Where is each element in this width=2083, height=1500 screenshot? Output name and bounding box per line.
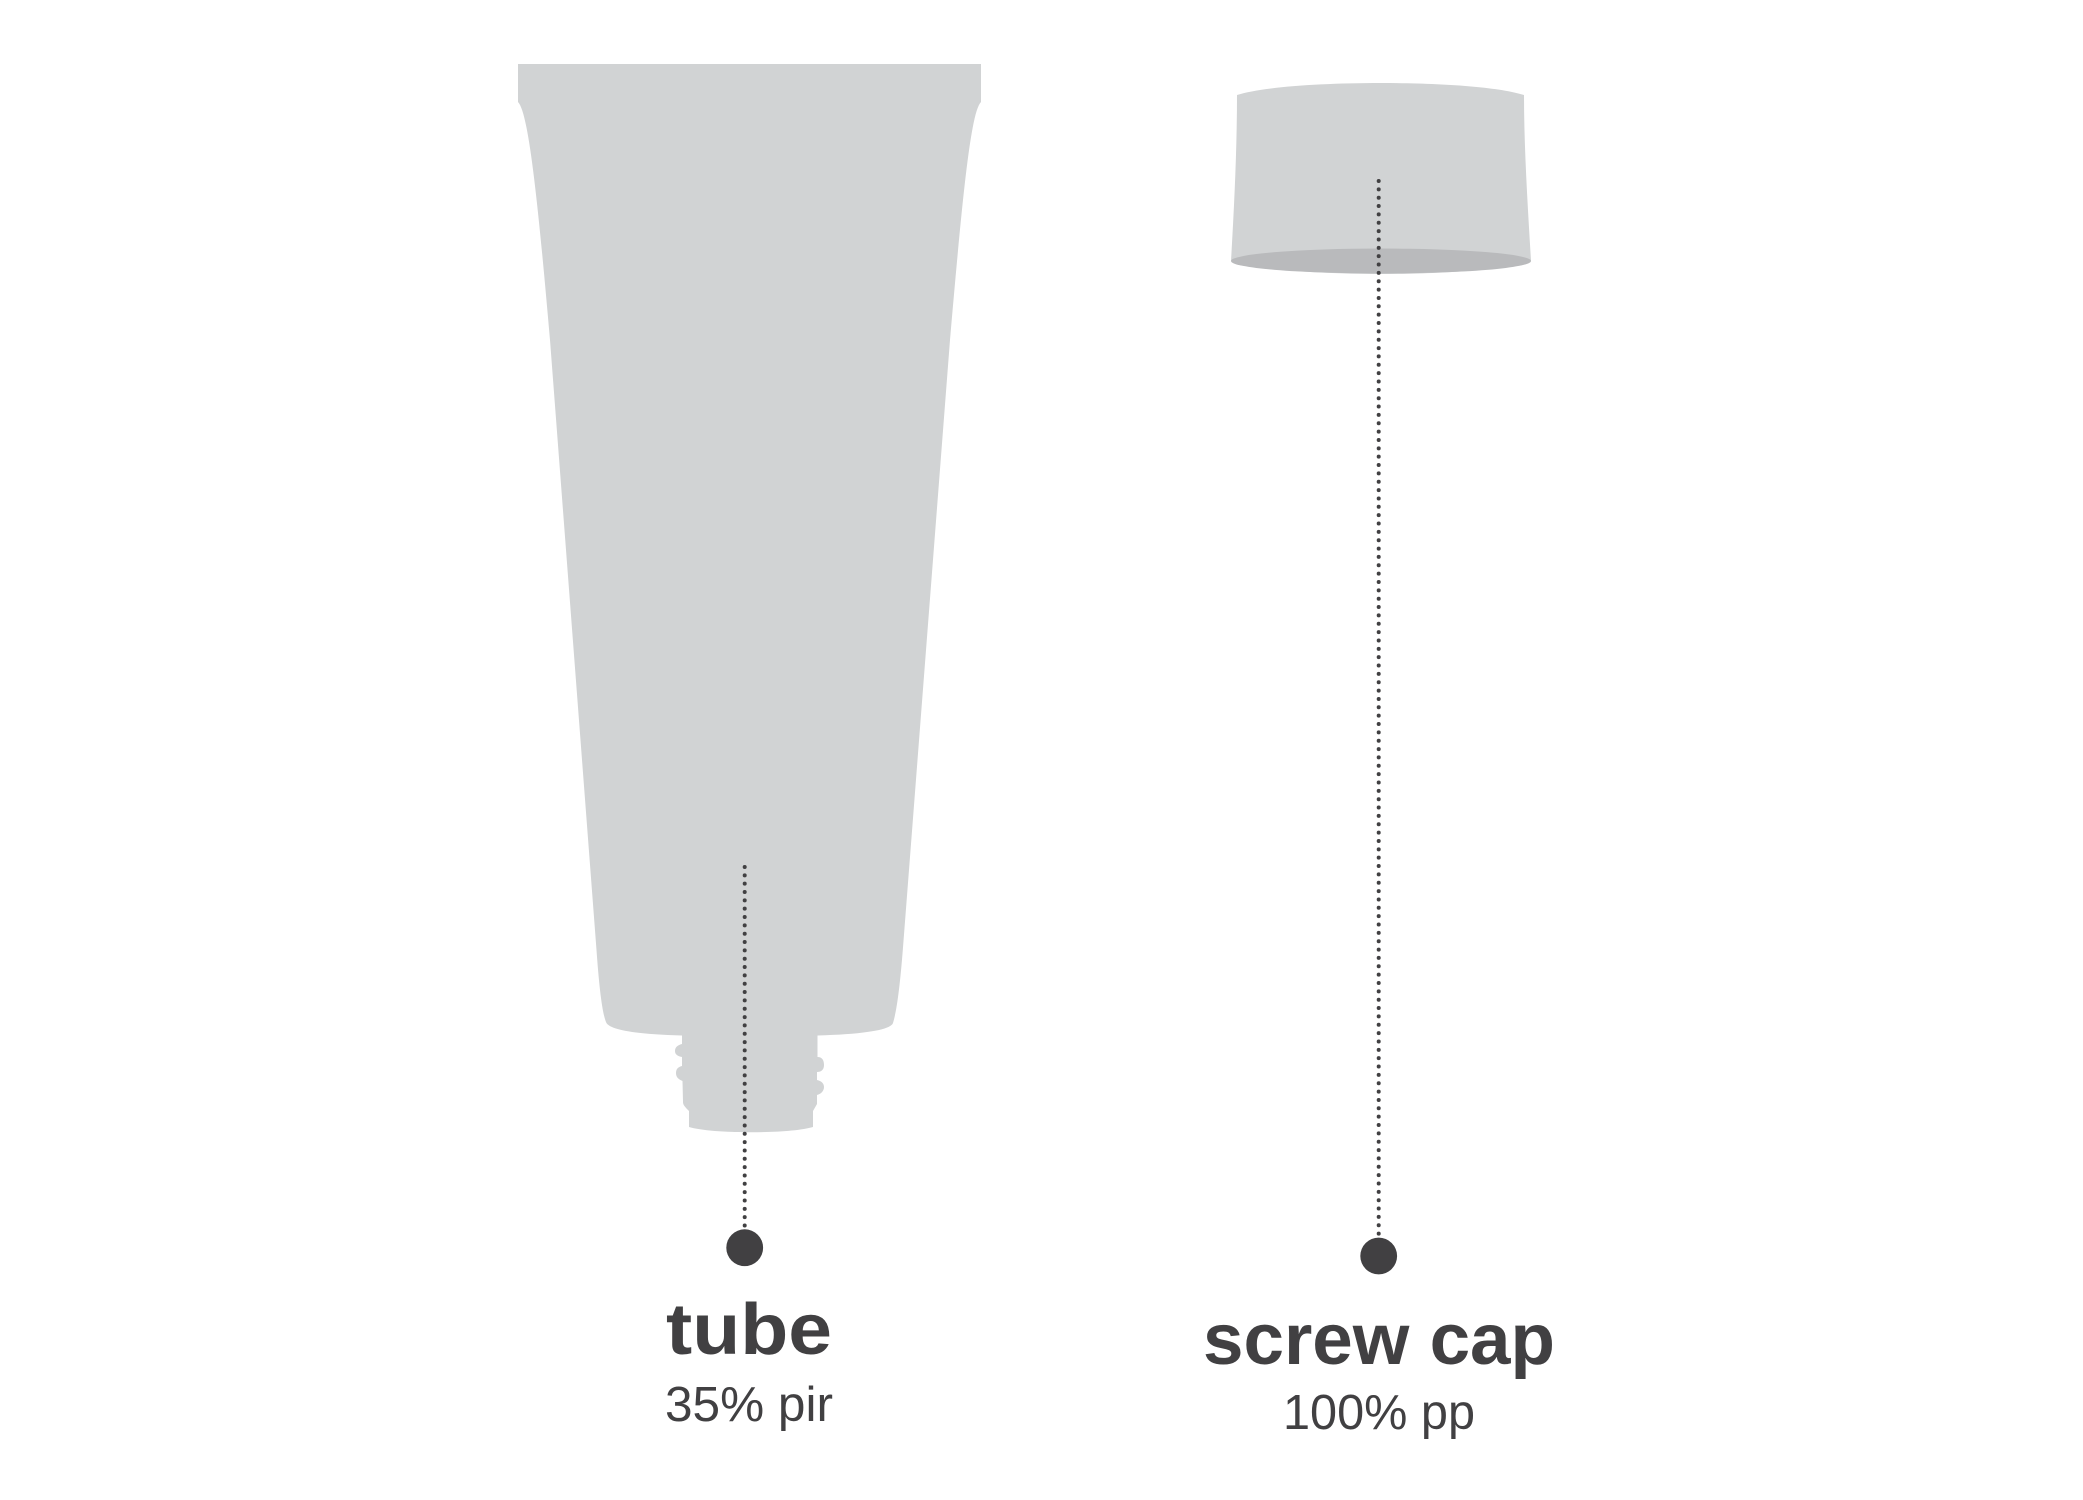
screw cap component (1203, 83, 1555, 1440)
tube material: 35% pir (665, 1378, 833, 1432)
tube label: tube (666, 1290, 832, 1370)
tube leader dot (726, 1229, 763, 1266)
cap underside ellipse (1231, 248, 1531, 274)
screw cap material: 100% pp (1283, 1386, 1475, 1440)
cap leader dot (1360, 1238, 1397, 1274)
screw cap label: screw cap (1203, 1300, 1555, 1380)
cap silhouette (1231, 83, 1531, 274)
tube leader line (743, 867, 747, 1226)
tube component (518, 64, 981, 1432)
cap leader line (1377, 181, 1381, 1234)
tube silhouette (518, 64, 981, 1132)
